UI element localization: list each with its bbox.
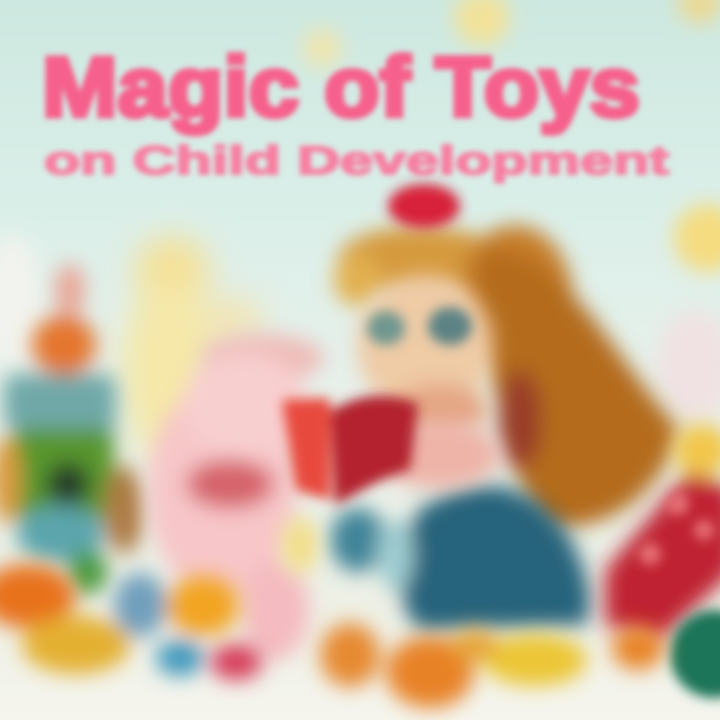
title [42, 40, 669, 183]
green ball [670, 610, 720, 698]
girl doll [330, 184, 680, 630]
background bokeh lights [0, 0, 720, 420]
title: Magic of Toys [42, 40, 640, 134]
hands [380, 421, 500, 489]
yellow toy in the background [122, 236, 262, 460]
stacking toy tower [0, 264, 144, 594]
hair [334, 225, 680, 527]
subtitle: on Child Development [44, 139, 669, 183]
hat [388, 184, 460, 228]
pink toy pig [148, 334, 324, 660]
red book [282, 396, 418, 505]
dress [330, 485, 590, 630]
scattered foreground toys [0, 517, 664, 708]
red building blocks [605, 424, 720, 698]
eyes [367, 307, 472, 345]
face [357, 275, 493, 436]
